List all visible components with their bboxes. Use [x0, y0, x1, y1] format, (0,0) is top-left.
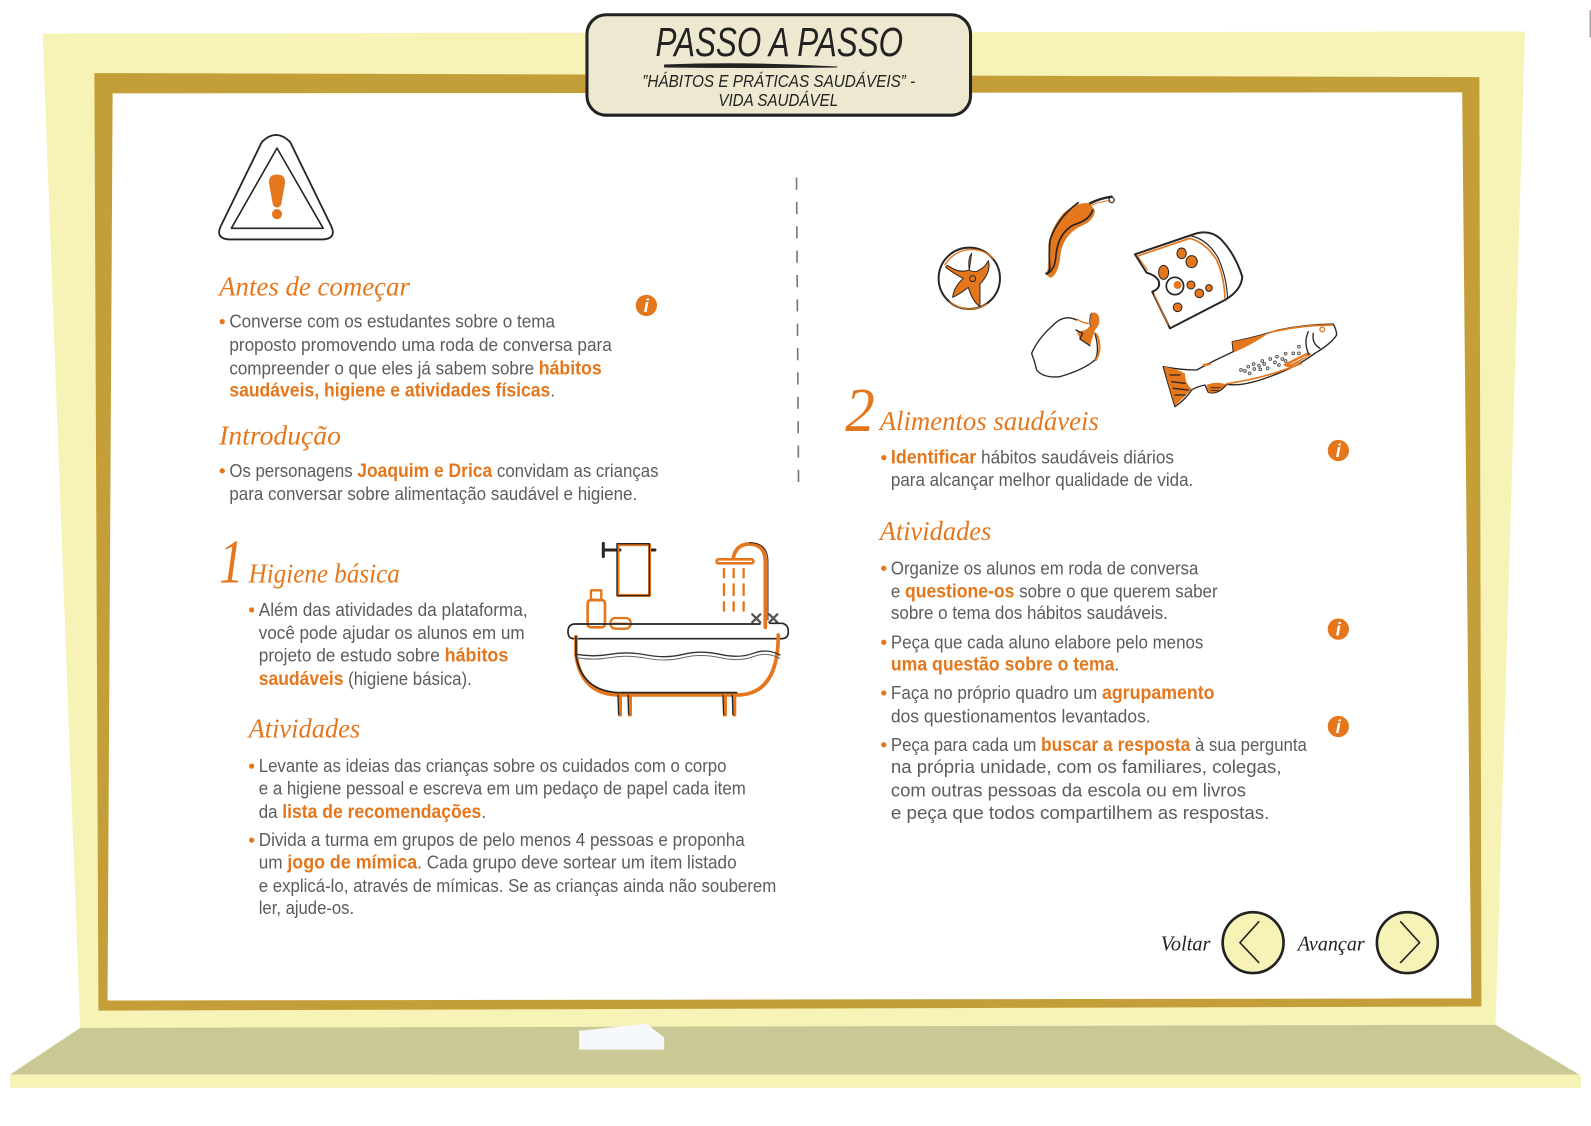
bullet text: para conversar sobre alimentação saudável e higiene. [229, 483, 637, 504]
number 2: 2 [845, 375, 875, 445]
intro text: saudáveis (higiene básica). [259, 668, 472, 690]
icon: info [1328, 716, 1349, 737]
section 2: alimentos saudáveis [845, 375, 1349, 823]
chalk tray [10, 1025, 1581, 1076]
board gold frame [94, 73, 1481, 1011]
icon: fish [1163, 324, 1337, 407]
bullet text: Converse com os estudantes sobre o tema [229, 311, 556, 332]
heading: Higiene básica [248, 558, 400, 588]
activity text: com outras pessoas da escola ou em livros [891, 780, 1246, 801]
intro text [881, 447, 1193, 490]
icon: info: i [1336, 440, 1342, 461]
icon: info [1328, 440, 1349, 461]
subtitle text: ”HÁBITOS E PRÁTICAS SAUDÁVEIS” - [642, 71, 915, 91]
bullet text: Os personagens Joaquim e Drica convidam as crianças [229, 460, 659, 482]
bullet text [220, 460, 659, 504]
intro text [249, 599, 528, 690]
navigation: avançar [1296, 912, 1438, 973]
bullet text: proposto promovendo uma roda de conversa para [229, 334, 613, 355]
icons: healthy foods [939, 197, 1337, 407]
number 1: 1 [219, 526, 244, 596]
section: introdução [218, 420, 659, 504]
subheading: atividades: Atividades [247, 714, 360, 744]
board white writing surface [108, 92, 1471, 1000]
title plate: VIDA SAUDÁVEL [718, 90, 838, 110]
activity text: Levante as ideias das crianças sobre os cuidados com o corpo [259, 755, 727, 776]
arrow button: next [1377, 912, 1438, 973]
icon: info: i [1336, 619, 1342, 640]
activity text: e a higiene pessoal e escreva em um pedaço de papel cada item [259, 777, 746, 798]
heading: Antes de começar [217, 271, 410, 301]
activity text: uma questão sobre o tema. [891, 654, 1119, 676]
icon: starfish [939, 248, 1000, 309]
activity text: na própria unidade, com os familiares, colegas, [891, 756, 1282, 777]
bullet text: compreender o que eles já sabem sobre hábitos [229, 357, 602, 379]
icon: info: i [644, 295, 650, 316]
activity text: e questione-os sobre o que querem saber [891, 581, 1218, 603]
icon: bell pepper [1032, 312, 1099, 377]
navigation: voltar: Voltar [1161, 932, 1211, 956]
activity text: um jogo de mímica. Cada grupo deve sortear um item listado [259, 852, 737, 874]
section 1: higiene básica [219, 526, 788, 918]
icon: info: i [1336, 716, 1342, 737]
intro text: projeto de estudo sobre hábitos [259, 645, 508, 667]
activity text: Peça para cada um buscar a resposta à sua pergunta [891, 734, 1308, 756]
icon: info [636, 295, 657, 316]
title plate [587, 15, 971, 115]
activity text: Peça que cada aluno elabore pelo menos [891, 631, 1203, 652]
activity text: da lista de recomendações. [259, 801, 486, 823]
section: antes de começar [217, 271, 657, 402]
activity text [881, 557, 1308, 823]
navigation: avançar: Avançar [1296, 932, 1365, 956]
bullet text: saudáveis, higiene e atividades físicas. [229, 380, 555, 402]
intro text: você pode ajudar os alunos em um [259, 622, 525, 643]
intro text: para alcançar melhor qualidade de vida. [891, 469, 1193, 490]
title text: PASSO A PASSO [655, 19, 903, 65]
icon: cheese [1135, 232, 1242, 328]
intro text: Além das atividades da plataforma, [259, 599, 528, 620]
activity text: e explicá-lo, através de mímicas. Se as crianças ainda não souberem [259, 875, 776, 896]
activity text [249, 755, 776, 918]
navigation: voltar [1161, 912, 1284, 973]
activity text: sobre o tema dos hábitos saudáveis. [891, 602, 1168, 623]
heading: Alimentos saudáveis [878, 406, 1099, 436]
subheading: atividades: Atividades [878, 516, 991, 546]
icon: chili pepper [1046, 197, 1114, 278]
bullet text [220, 311, 613, 402]
activity text: dos questionamentos levantados. [891, 705, 1151, 726]
intro text: Identificar hábitos saudáveis diários [891, 447, 1174, 469]
activity text: Faça no próprio quadro um agrupamento [891, 682, 1215, 704]
activity text: Divida a turma em grupos de pelo menos 4 pessoas e proponha [259, 829, 746, 850]
arrow button: back [1223, 912, 1284, 973]
activity text: Organize os alunos em roda de conversa [891, 557, 1199, 578]
chalk piece [579, 1024, 664, 1050]
chalk tray lip [10, 1075, 1581, 1088]
activity text: e peça que todos compartilhem as respostas. [891, 802, 1269, 823]
icon: info [1328, 618, 1349, 640]
icon: bathtub [568, 543, 788, 715]
heading: Introdução [218, 420, 341, 450]
activity text: ler, ajude-os. [259, 897, 354, 918]
icon: warning triangle [219, 135, 333, 239]
